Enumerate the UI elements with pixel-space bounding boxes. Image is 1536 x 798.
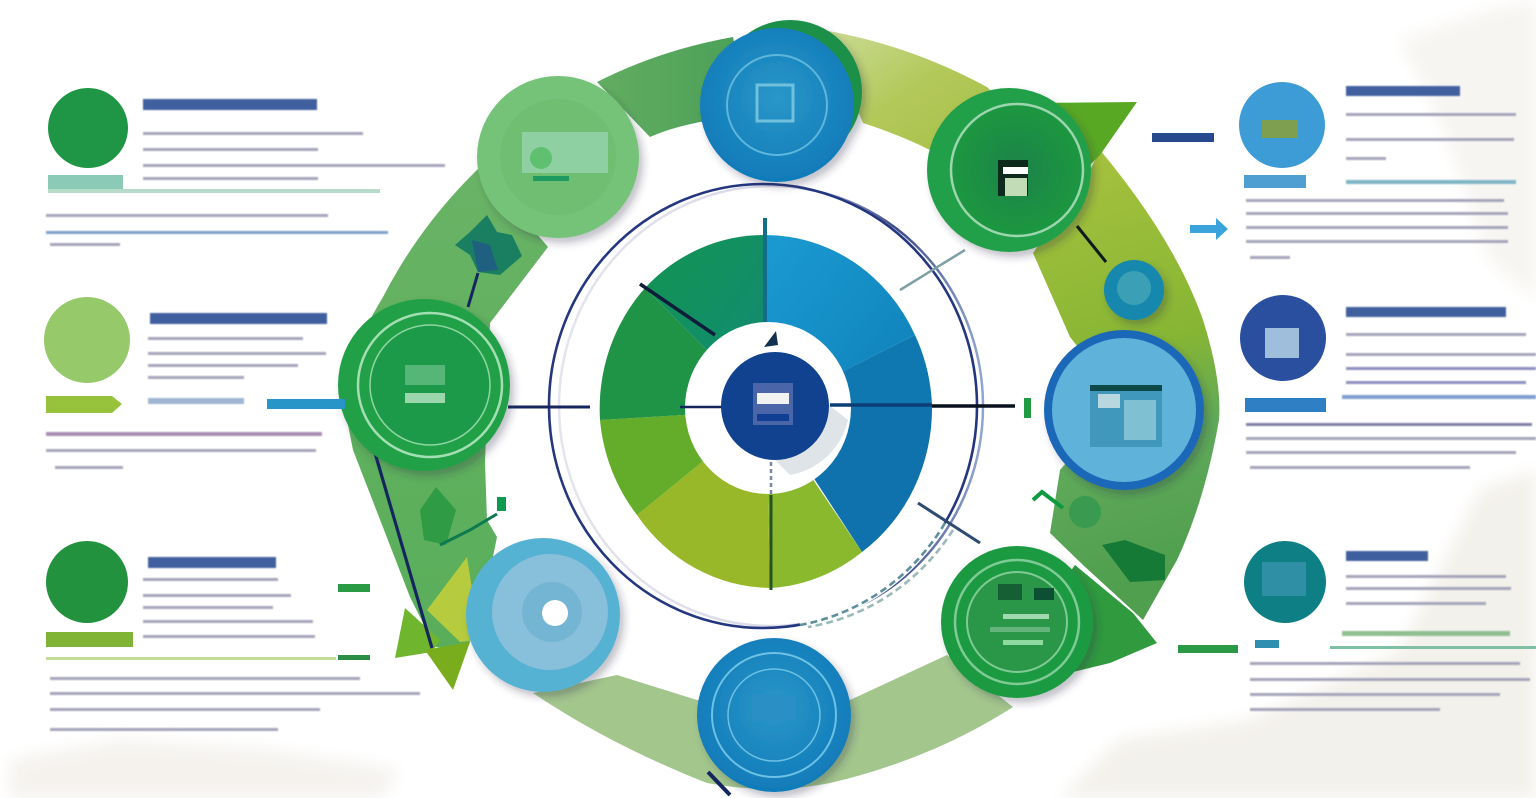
heading bar [143,99,317,110]
heading bar [150,313,327,324]
panel: lower right [1178,541,1536,711]
central pie chart [600,235,932,588]
node: bottom right green [941,546,1093,698]
node: left green [338,299,510,471]
top notch marker [764,331,778,347]
arrowhead: bottom left [395,557,480,690]
heading bar [148,557,276,568]
icon: middle left [44,297,130,383]
node: top left pale green [477,76,639,238]
icon: upper left [48,88,128,168]
ring segment: bottom [533,655,1013,789]
heading bar [1346,551,1428,561]
thin orbit rings [549,184,983,628]
arrowhead: bottom right [1040,565,1157,680]
panel: upper left [46,88,445,246]
panel: middle left [44,297,345,469]
icon: lower left [46,541,128,623]
panel: middle right [1240,295,1536,469]
spokes and axis arrows [375,218,1106,795]
panel: upper right [1152,82,1516,259]
icon: leaf lower left [420,487,506,545]
axis marker right [1024,398,1031,418]
node: right blue [1044,330,1204,490]
node: top right green [927,88,1091,252]
ring segment: right [1033,150,1219,620]
icon: lower right [1244,541,1326,623]
arrowhead: top right [1040,102,1137,170]
node: top blue [700,20,862,182]
ring segment: left [343,167,548,650]
icon: leaves lower right [1033,492,1165,582]
heading bar [1346,307,1506,317]
node: bottom blue [697,638,851,792]
central hub icon [721,352,829,460]
ring segment: top left [597,37,750,137]
icon: leaf upper left [455,215,522,275]
green cycle ring [343,30,1219,789]
icon: upper right [1239,82,1325,168]
node: small teal [1104,260,1164,320]
ring segment: top right [823,30,1000,150]
panel: lower left [46,541,420,731]
icon: middle right [1240,295,1326,381]
heading bar [1346,86,1460,96]
node: bottom left light blue [466,538,620,692]
